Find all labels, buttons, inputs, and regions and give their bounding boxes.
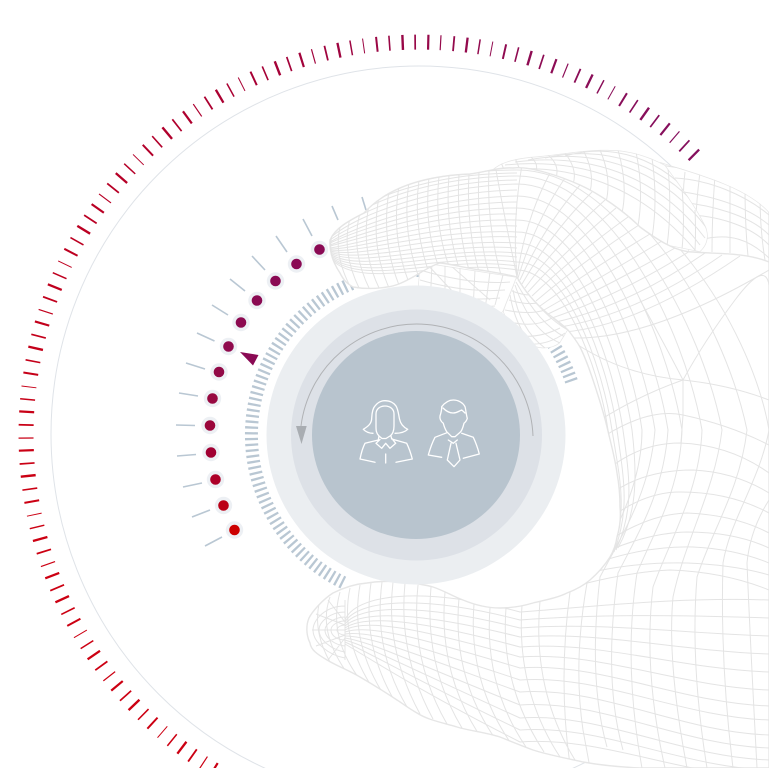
inner disc <box>312 331 520 539</box>
pointer triangle <box>240 352 258 366</box>
fan midlines <box>518 178 722 327</box>
central dial <box>266 286 566 584</box>
radial grey marker lines <box>176 197 366 546</box>
icon: man <box>428 400 479 467</box>
back finger mesh under index <box>418 264 516 312</box>
palm and index finger mesh <box>312 165 769 768</box>
inner grey tick ring <box>251 271 572 583</box>
coloured dots <box>203 242 326 537</box>
index finger extra lengthwise lines <box>330 173 517 271</box>
wireframe hand <box>307 150 769 768</box>
palm and index finger outline <box>307 168 769 768</box>
outer disc <box>266 286 566 584</box>
middle finger mesh <box>490 150 708 252</box>
icon: woman <box>360 401 412 463</box>
rotation arc arrow <box>296 324 533 444</box>
middle disc <box>291 310 542 560</box>
ring finger mesh <box>660 162 769 270</box>
curled finger mesh <box>503 277 568 348</box>
thumb tip concentric lines <box>312 600 345 660</box>
